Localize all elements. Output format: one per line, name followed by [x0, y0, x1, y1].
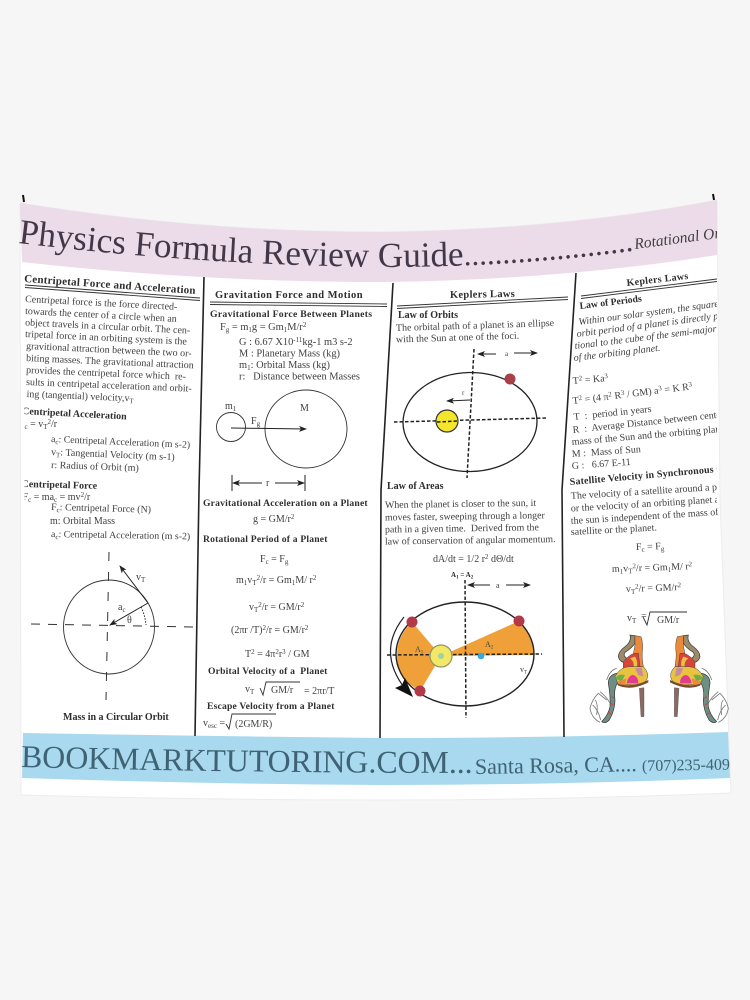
centripetal force formulas: F	[51, 502, 57, 513]
heading rule	[210, 302, 387, 306]
law of periods: tional to the cube of the semi-major axis	[574, 321, 736, 352]
force between planets: Gravitational Force Between Planets	[210, 309, 372, 320]
footer phone: (707)235-409	[642, 756, 730, 775]
centripetal acceleration formulas: r: Radius of Orbit (m)	[51, 460, 139, 474]
diagram: law of areas: A	[451, 571, 456, 579]
law of periods: 3	[658, 384, 663, 392]
centripetal force formulas: a	[51, 529, 55, 540]
law of areas text	[385, 481, 556, 565]
centripetal acceleration formulas: v	[51, 447, 56, 458]
intro paragraph: ing (tangential) velocity,v	[26, 389, 130, 404]
satellite velocity: M/ r	[671, 561, 690, 573]
title: Physics Formula Review Guide......................	[19, 220, 632, 268]
acceleration and period derivation: = F	[269, 554, 285, 565]
law of areas text: When the planet is closer to the sun, it	[385, 498, 536, 511]
centripetal force formulas: : Centripetal Force (N)	[60, 502, 151, 516]
centripetal force formulas: 2	[81, 491, 85, 499]
force between planets: 1	[284, 326, 288, 334]
acceleration and period derivation: Gravitational Acceleration on a Planet	[203, 498, 368, 509]
heading rule	[25, 285, 200, 300]
law of periods: 3	[604, 372, 609, 380]
centripetal acceleration formulas: : Centripetal Acceleration (m s-2)	[58, 434, 190, 451]
heading: gravitation force and motion: Gravitation Force and Motion	[215, 290, 363, 301]
acceleration and period derivation: 2	[262, 624, 266, 632]
centripetal force formulas: /r	[84, 492, 91, 503]
law of periods: of the orbiting planet.	[573, 343, 661, 364]
satellite velocity: T	[632, 617, 637, 625]
acceleration and period derivation: / GM	[286, 649, 310, 660]
force between planets: : Orbital Mass (kg)	[251, 360, 330, 371]
diagram: two masses: r	[266, 478, 270, 489]
centripetal acceleration formulas: T	[43, 423, 48, 431]
law of periods: T : period in years	[573, 404, 652, 423]
intro paragraph: Centripetal force is the force directed-	[25, 294, 178, 313]
law of periods: G : 6.67 E-11	[571, 457, 631, 472]
acceleration and period derivation: T	[254, 606, 259, 614]
intro paragraph: tripetal force in an orbiting system is the	[25, 329, 188, 348]
acceleration and period derivation: /r = GM/r	[262, 602, 301, 613]
diagram: mass in circular orbit: c	[122, 606, 126, 614]
diagram: law of areas: A	[415, 645, 421, 654]
satellite velocity: or the velocity of an orbiting planet around	[571, 493, 743, 514]
law of periods: = (4 π	[582, 392, 609, 406]
acceleration and period derivation: c	[266, 558, 269, 566]
acceleration and period derivation: 2	[258, 601, 262, 609]
diagram: law of orbits: r	[462, 389, 465, 397]
footer website: BOOKMARKTUTORING.COM...	[22, 746, 470, 774]
force between planets: r: Distance between Masses	[239, 372, 360, 382]
satellite velocity: T	[628, 567, 633, 575]
force between planets: 1	[247, 364, 251, 372]
hanging pins	[23, 194, 714, 202]
law of areas text: Law of Areas	[387, 481, 444, 492]
law of orbits text: with the Sun at one of the foci.	[396, 331, 519, 345]
satellite velocity: 2	[688, 560, 693, 568]
centripetal force formulas: = mv	[57, 492, 81, 503]
satellite velocity: =	[641, 611, 647, 622]
centripetal force formulas: c	[54, 496, 57, 504]
diagram: mass in circular orbit	[31, 552, 194, 700]
satellite velocity: m	[612, 564, 620, 575]
acceleration and period derivation: F	[260, 554, 266, 565]
acceleration and period derivation: 1	[292, 579, 296, 587]
orbital and escape velocity: =	[217, 718, 225, 729]
diagram: two masses	[216, 390, 347, 491]
acceleration and period derivation: 2	[291, 513, 295, 521]
orbital and escape velocity: Orbital Velocity of a Planet	[208, 666, 328, 677]
heading: centripetal force and acceleration: Centripetal Force and Acceleration	[24, 273, 196, 297]
law of periods: R	[611, 390, 622, 402]
satellite velocity: Satellite Velocity in Synchronous Orbit	[569, 462, 742, 488]
orbital and escape velocity: Escape Velocity from a Planet	[207, 701, 335, 712]
law of periods: 3	[620, 389, 625, 397]
heading: keplers laws: Keplers Laws	[626, 271, 689, 289]
intro paragraph: sults in centripetal acceleration and orbit-	[26, 377, 192, 395]
satellite velocity: T	[631, 588, 636, 596]
diagram: law of orbits: a	[505, 350, 509, 358]
illustration: high heel shoes	[590, 635, 728, 723]
orbital and escape velocity: T	[250, 688, 255, 696]
panel: centripetal force	[20, 273, 200, 723]
centripetal force formulas	[21, 479, 190, 543]
tapestry sheet	[20, 200, 731, 800]
left shoe	[590, 635, 648, 723]
satellite velocity: /r = GM/r	[638, 582, 678, 595]
diagram: law of areas: v	[520, 665, 524, 674]
footer location: Santa Rosa, CA....	[475, 751, 637, 779]
acceleration and period derivation: g	[285, 558, 289, 566]
law of periods: T	[572, 375, 579, 387]
centripetal force formulas: = ma	[31, 492, 55, 503]
law of periods: = Ka	[582, 373, 606, 386]
centripetal acceleration formulas: : Tangential Velocity (m s-1)	[60, 447, 175, 463]
diagram: mass in circular orbit: v	[136, 572, 141, 583]
acceleration and period derivation: /r = GM/r	[266, 625, 306, 636]
law of periods: 2	[578, 394, 583, 402]
diagram: law of areas: T	[524, 670, 527, 676]
acceleration and period derivation: M/ r	[295, 575, 313, 586]
satellite velocity: The velocity of a satellite around a planet	[571, 481, 737, 502]
intro paragraph: biting masses. The gravitational attraction	[26, 353, 194, 371]
acceleration and period derivation: g = GM/r	[253, 514, 291, 525]
orbital and escape velocity	[203, 666, 335, 730]
acceleration and period derivation: v	[247, 575, 252, 586]
centripetal acceleration formulas: T	[56, 451, 61, 459]
acceleration and period derivation: /r = Gm	[260, 575, 292, 586]
force between planets: = m	[229, 322, 248, 333]
centripetal acceleration formulas: /r	[51, 419, 58, 430]
force between planets: -11	[293, 336, 303, 344]
diagram: two masses: 1	[233, 405, 237, 413]
intro paragraph: towards the center of a circle when an	[25, 306, 177, 325]
centripetal force formulas: F	[22, 492, 28, 503]
acceleration and period derivation: T	[245, 649, 251, 660]
diagram: law of orbits	[394, 349, 547, 478]
law of areas text: dA/dt = 1/2 r	[433, 554, 485, 565]
satellite velocity	[570, 467, 718, 626]
law of orbits text: Law of Orbits	[398, 310, 458, 321]
satellite velocity: the sun is independent of the mass of the	[571, 506, 734, 527]
force between planets: g = Gm	[252, 322, 284, 333]
law of periods: Within our solar system, the square of the	[578, 295, 745, 328]
header side text: Rotational Orbit	[632, 223, 738, 253]
diagram: mass in circular orbit: T	[141, 576, 146, 584]
column dividers	[195, 273, 576, 738]
acceleration and period derivation: 2	[313, 574, 317, 582]
diagram: law of areas: 1	[456, 576, 459, 580]
diagram: two masses: g	[257, 420, 261, 428]
force between planets: kg-1 m3 s-2	[302, 337, 353, 348]
diagram: mass in circular orbit: θ	[127, 615, 132, 626]
acceleration and period derivation: r	[279, 649, 283, 660]
acceleration and period derivation: 1	[244, 579, 248, 587]
centripetal force formulas: c	[28, 496, 31, 504]
heading rule	[397, 297, 568, 308]
force between planets: F	[220, 322, 226, 333]
diagram: law of areas: 1	[421, 650, 424, 656]
acceleration and period derivation: 2	[301, 601, 305, 609]
satellite velocity: v	[627, 613, 632, 624]
centripetal acceleration formulas: c	[24, 423, 28, 431]
law of periods: mass of the Sun and the orbiting planet	[571, 423, 728, 448]
law of periods: R : Average Distance between center of	[572, 408, 736, 436]
panel: keplers laws continued	[570, 274, 718, 626]
acceleration and period derivation	[203, 498, 368, 660]
law of areas text: moves faster, sweeping through a longer	[385, 510, 545, 523]
diagram: law of areas: 2	[491, 646, 494, 650]
law of orbits text	[396, 310, 555, 345]
law of orbits text: The orbital path of a planet is an ellipse	[396, 318, 555, 334]
panel: gravitation	[203, 290, 387, 730]
acceleration and period derivation: 3	[282, 648, 286, 656]
acceleration and period derivation: m	[236, 575, 244, 586]
centripetal acceleration formulas: = v	[28, 419, 43, 430]
intro paragraph: gravitional attraction between the two or-	[26, 341, 192, 360]
centripetal force formulas: c	[56, 506, 60, 514]
centripetal acceleration formulas	[20, 406, 190, 474]
orbital and escape velocity: v	[203, 718, 208, 729]
orbital and escape velocity: GM/r	[271, 685, 294, 696]
intro paragraph	[25, 294, 194, 405]
centripetal acceleration formulas: a	[51, 434, 56, 445]
diagram: two masses: F	[251, 416, 257, 427]
satellite velocity: 2	[632, 562, 637, 570]
acceleration and period derivation: v	[249, 602, 254, 613]
acceleration and period derivation: 2	[305, 624, 309, 632]
force between planets: 2	[303, 321, 307, 329]
centripetal force formulas: m: Orbital Mass	[50, 516, 115, 527]
centripetal acceleration formulas: Centripetal Acceleration	[22, 406, 127, 422]
heading rule	[581, 279, 717, 298]
force between planets: M : Planetary Mass (kg)	[239, 348, 340, 360]
diagram: two masses: m	[225, 401, 233, 412]
law of periods: T	[572, 395, 579, 407]
law of areas text: path in a given time. Derived from the	[385, 522, 539, 535]
satellite velocity: 1	[668, 566, 672, 574]
centripetal force formulas: : Centripetal Acceleration (m s-2)	[58, 529, 190, 542]
caption: Mass in a Circular Orbit	[63, 712, 169, 723]
centripetal acceleration formulas: a	[20, 419, 24, 430]
centripetal acceleration formulas: 2	[47, 418, 51, 426]
satellite velocity: = F	[644, 541, 661, 553]
diagram: two masses: M	[300, 403, 309, 414]
intro paragraph: object travels in a circular orbit. The cen-	[25, 318, 191, 337]
acceleration and period derivation: 2	[251, 648, 255, 656]
law of periods	[572, 295, 717, 469]
orbital and escape velocity: = 2πr/T	[304, 686, 334, 697]
satellite velocity: satellite or the planet.	[571, 523, 657, 538]
law of areas text: law of conservation of angular momentum.	[385, 534, 556, 547]
satellite velocity: 2	[635, 583, 639, 591]
law of periods: M : Mass of Sun	[571, 444, 641, 460]
diagram: law of areas	[387, 571, 542, 718]
satellite velocity: v	[623, 563, 628, 575]
force between planets: G : 6.67 X10	[239, 337, 293, 348]
law of areas text: dΘ/dt	[489, 554, 514, 565]
law of areas text: 2	[485, 553, 489, 561]
acceleration and period derivation: T	[252, 579, 257, 587]
intro paragraph: provides the centripetal force which re-	[26, 365, 186, 383]
acceleration and period derivation: = 4π	[255, 649, 275, 660]
law of periods: = K R	[661, 382, 690, 396]
satellite velocity: v	[626, 584, 631, 595]
centripetal acceleration formulas: c	[55, 438, 59, 446]
diagram: law of areas: 2	[471, 576, 474, 580]
satellite velocity: 2	[677, 581, 682, 589]
orbital and escape velocity: (2GM/R)	[235, 719, 272, 730]
force between planets: M/r	[287, 322, 303, 333]
centripetal force formulas: Centripetal Force	[21, 479, 98, 492]
acceleration and period derivation: (2πr /T)	[231, 625, 262, 636]
satellite velocity: c	[641, 546, 645, 554]
header band	[20, 200, 717, 282]
force between planets: 1	[248, 326, 252, 334]
intro paragraph: T	[129, 397, 135, 405]
diagram: law of areas: = A	[459, 571, 471, 579]
force between planets: g	[226, 326, 230, 334]
satellite velocity: g	[661, 545, 665, 553]
orbital and escape velocity: esc	[208, 722, 217, 730]
panel: keplers laws	[385, 289, 568, 718]
law of periods: 2	[578, 374, 583, 382]
diagram: mass in circular orbit: a	[118, 602, 122, 613]
law of periods: Law of Periods	[579, 293, 643, 312]
satellite velocity: GM/r	[657, 615, 680, 626]
acceleration and period derivation: 2	[275, 648, 279, 656]
satellite velocity: /r = Gm	[636, 562, 668, 574]
centripetal force formulas: c	[55, 533, 59, 541]
heading: keplers laws: Keplers Laws	[450, 289, 515, 301]
satellite velocity: 1	[620, 568, 624, 576]
acceleration and period derivation: 2	[257, 574, 261, 582]
diagram: law of areas: a	[496, 581, 500, 590]
satellite velocity: F	[636, 542, 642, 553]
footer band	[22, 732, 730, 785]
diagram: law of areas: A	[485, 640, 491, 649]
force between planets	[210, 309, 372, 382]
law of periods: / GM) a	[624, 385, 660, 401]
force between planets: m	[239, 360, 247, 371]
law of periods: 3	[688, 380, 693, 389]
right shoe	[670, 635, 728, 723]
law of periods: 2	[608, 390, 613, 399]
acceleration and period derivation: Rotational Period of a Planet	[203, 534, 328, 545]
orbital and escape velocity: v	[245, 684, 250, 695]
